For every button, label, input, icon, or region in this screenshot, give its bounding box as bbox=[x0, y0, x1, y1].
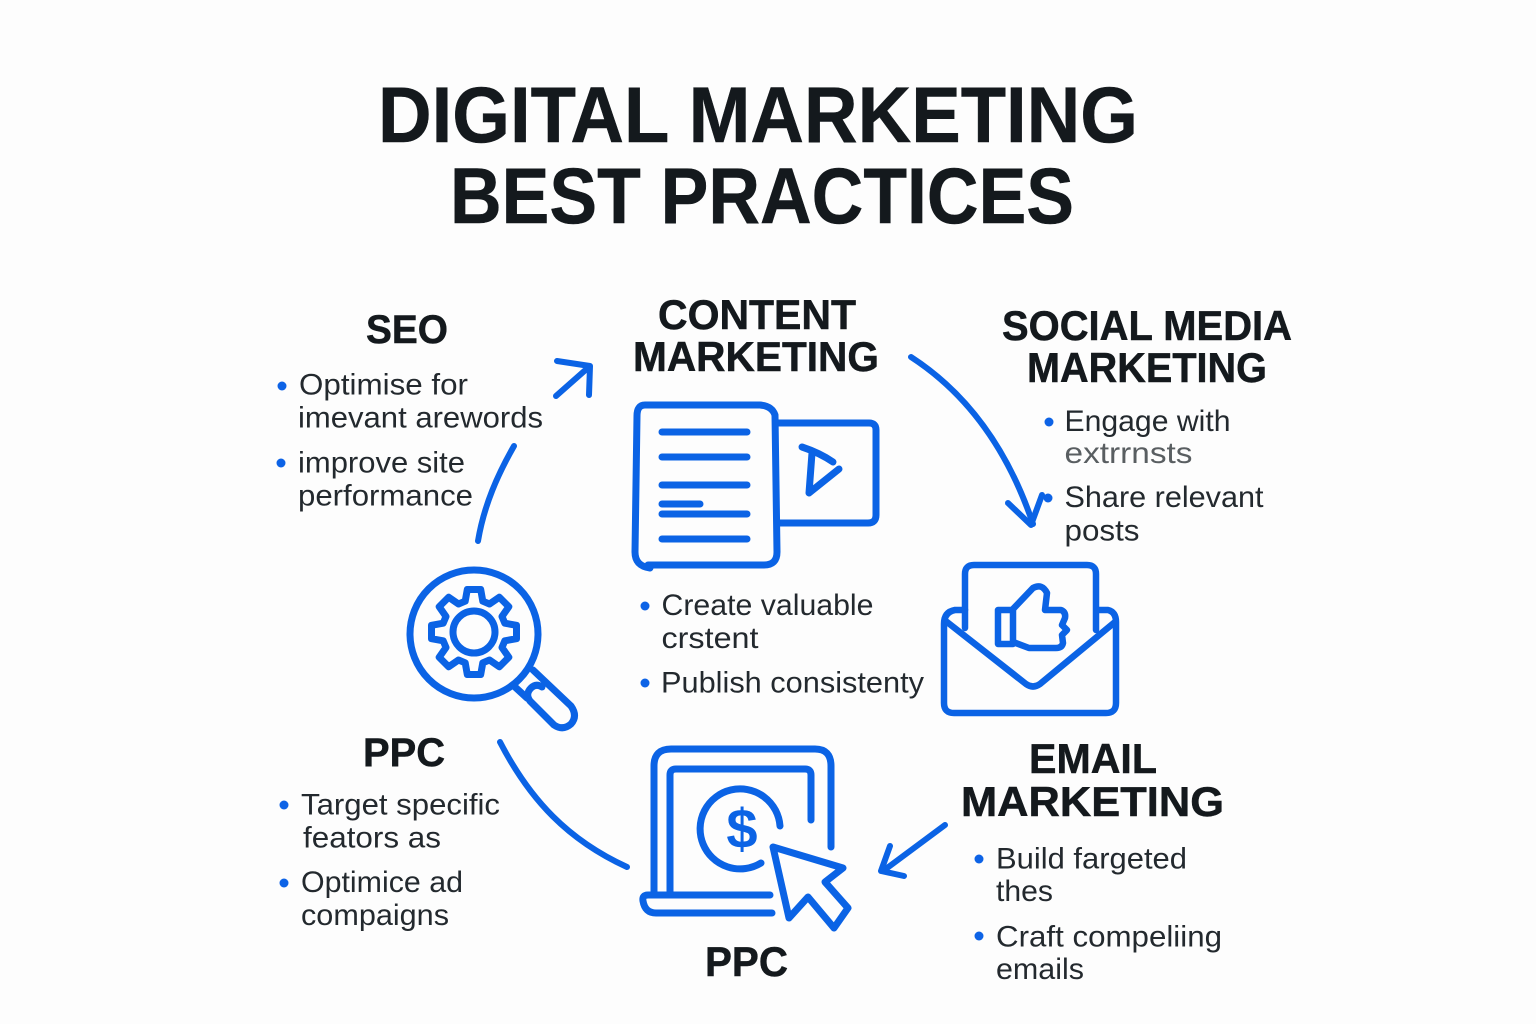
icon: laptop with dollar and cursor bbox=[643, 749, 848, 928]
arrow: PPC to SEO bbox=[478, 361, 590, 541]
panel: PPC left: Target specific bbox=[301, 788, 500, 822]
panel: SEO bbox=[276, 308, 543, 512]
panel: PPC left: feators as bbox=[303, 822, 441, 854]
panel: social media marketing: Share relevant bbox=[1064, 481, 1264, 514]
title: DIGITAL MARKETING bbox=[378, 70, 1138, 159]
panel: SEO: improve site bbox=[298, 446, 465, 480]
panel: content marketing heading: MARKETING bbox=[633, 333, 879, 380]
arrow: content to social bbox=[911, 357, 1042, 525]
panel: content marketing heading: CONTENT bbox=[658, 291, 856, 338]
panel: email marketing: thes bbox=[996, 875, 1053, 908]
title bbox=[378, 70, 1138, 240]
panel: content marketing bullets bbox=[640, 589, 924, 700]
panel: content marketing bullets: crstent bbox=[662, 622, 759, 655]
title: BEST PRACTICES bbox=[450, 151, 1074, 240]
icon: magnifier with gear bbox=[410, 570, 574, 728]
panel: SEO: Optimise for bbox=[299, 368, 468, 402]
arrow: email to laptop bbox=[881, 825, 945, 876]
panel: social media marketing: SOCIAL MEDIA bbox=[1002, 302, 1292, 349]
panel: email marketing: MARKETING bbox=[961, 778, 1224, 825]
icon: laptop with dollar and cursor: $ bbox=[726, 797, 758, 860]
panel: email marketing: EMAIL bbox=[1029, 735, 1157, 782]
panel: social media marketing bbox=[1002, 302, 1292, 548]
label: PPC bottom: PPC bbox=[705, 938, 788, 985]
panel: social media marketing: Engage with bbox=[1064, 405, 1230, 438]
panel: SEO: performance bbox=[298, 480, 473, 512]
panel: email marketing: Build fargeted bbox=[996, 842, 1187, 876]
arrow: laptop to PPC bbox=[500, 742, 627, 867]
panel: social media marketing: MARKETING bbox=[1027, 344, 1267, 391]
panel: content marketing bullets: Create valuable bbox=[662, 589, 874, 622]
panel: social media marketing: posts bbox=[1064, 514, 1140, 548]
panel: email marketing bbox=[961, 735, 1224, 986]
panel: SEO: SEO bbox=[366, 308, 448, 352]
panel: content marketing heading bbox=[633, 291, 879, 380]
panel: PPC left bbox=[280, 731, 500, 932]
icon: document and video bbox=[635, 405, 876, 568]
panel: PPC left: Optimice ad bbox=[301, 866, 463, 899]
panel: social media marketing: extrrnsts bbox=[1064, 437, 1192, 470]
panel: PPC left: PPC bbox=[363, 731, 445, 775]
panel: content marketing bullets: Publish consistenty bbox=[661, 666, 924, 700]
panel: email marketing: emails bbox=[996, 953, 1084, 986]
icon: envelope with thumbs up bbox=[944, 565, 1116, 713]
panel: email marketing: Craft compeliing bbox=[996, 920, 1222, 954]
panel: SEO: imevant arewords bbox=[298, 402, 543, 434]
panel: PPC left: compaigns bbox=[301, 899, 449, 932]
